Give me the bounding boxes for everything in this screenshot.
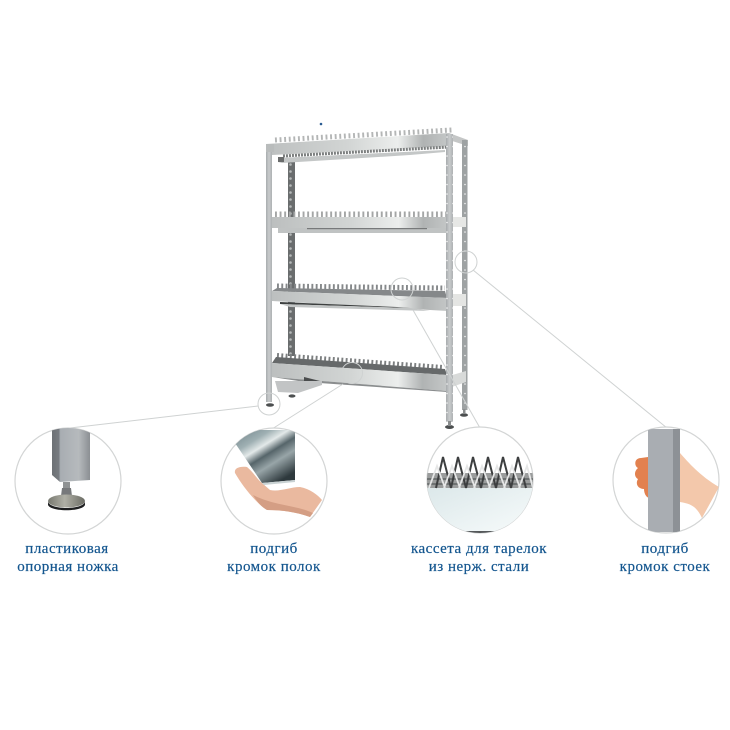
third shelf [272, 286, 466, 311]
callout: shelf edge marker and leader [272, 362, 362, 429]
caption: post edge: кромок стоек [620, 559, 711, 575]
top shelf [266, 130, 452, 163]
detail circle: post edge [613, 427, 719, 533]
callout: post marker and leader [455, 251, 667, 428]
left foot [266, 403, 274, 407]
callout: cassette marker and leader [391, 278, 480, 428]
shelving rack [266, 130, 468, 429]
caption: shelf edge: подгиб [250, 541, 298, 557]
caption: foot: пластиковая [25, 541, 109, 557]
second shelf [272, 214, 466, 233]
rear right post [449, 133, 468, 417]
callout: foot marker and leader [70, 393, 280, 428]
detail circle: plate cassette [427, 427, 533, 533]
caption: shelf edge: кромок полок [227, 559, 321, 575]
detail circle: foot [15, 428, 121, 534]
bottom shelf with tray [272, 356, 466, 398]
rear left post [288, 160, 295, 356]
drawer [275, 377, 322, 393]
caption: cassette: из нерж. стали [429, 559, 529, 575]
detail circle: shelf edge [221, 428, 327, 534]
right front post [445, 134, 454, 429]
left front post [266, 144, 274, 402]
caption: foot: опорная ножка [17, 559, 119, 575]
caption: post edge: подгиб [641, 541, 689, 557]
caption: cassette: кассета для тарелок [411, 541, 547, 557]
small blue dot [320, 123, 322, 125]
